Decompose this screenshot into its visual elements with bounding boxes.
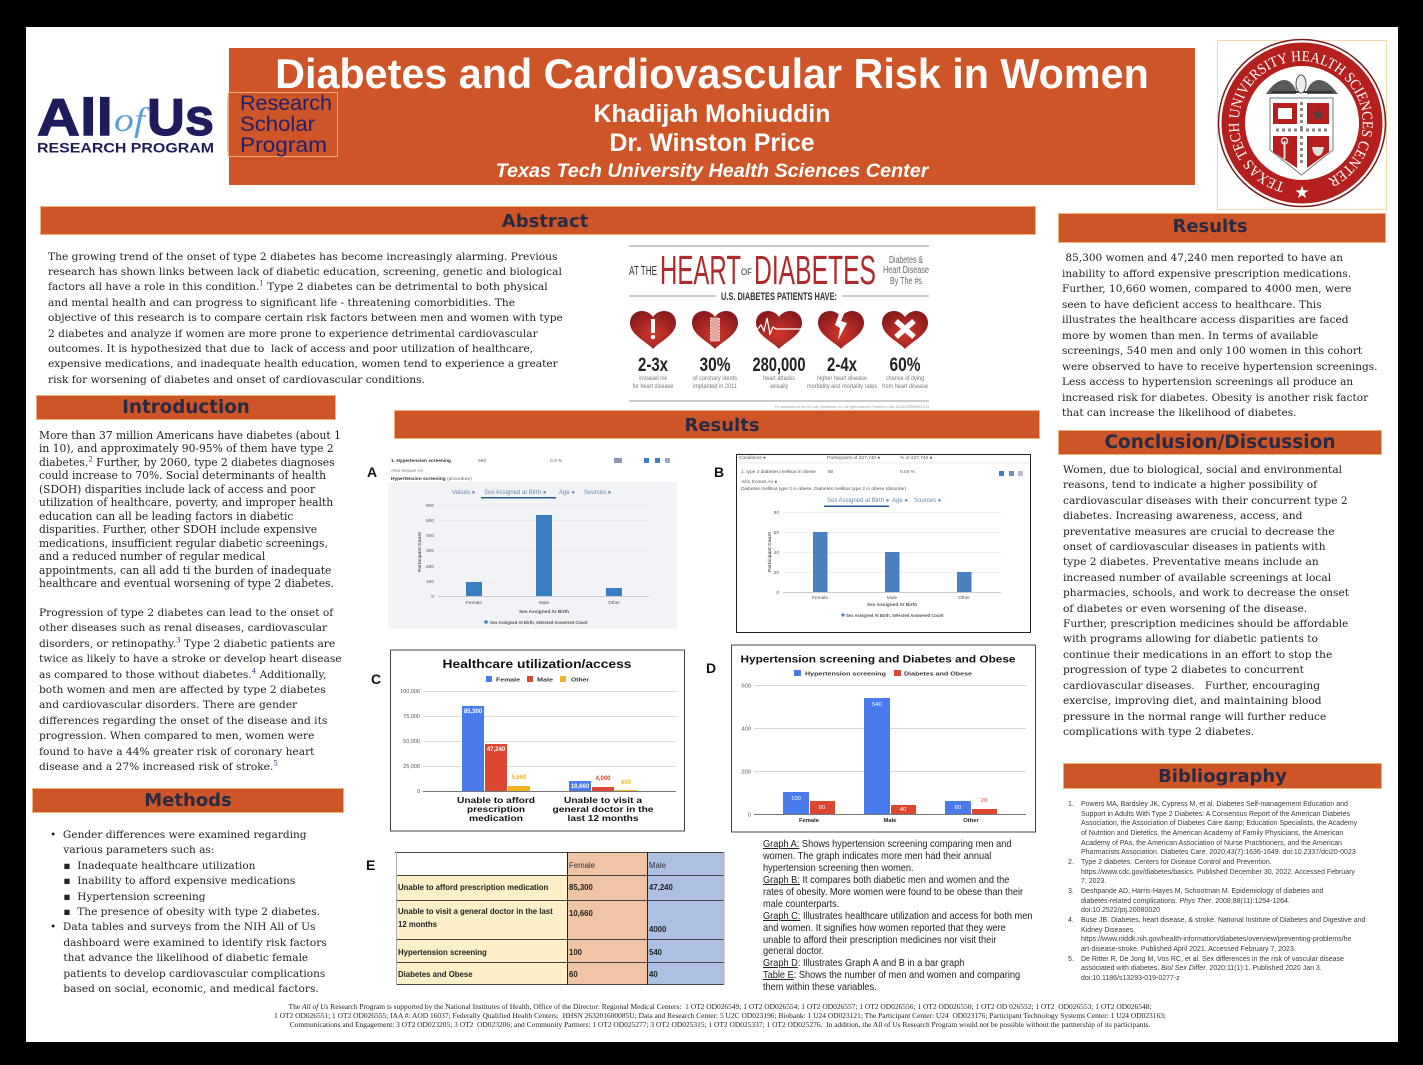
methods list: dashboard were examined to identify risk factors (63, 937, 327, 949)
introduction paragraph 2: progression. When compared to men, women were (39, 729, 314, 742)
infographic: At the Heart of Diabetes: 2-4x (827, 355, 857, 376)
chart A: hypertension screening screenshot: 200 (426, 564, 434, 570)
conclusion text: cardiovascular diseases with their concurrent type 2 (1063, 494, 1348, 507)
chart A: hypertension screening screenshot: Age ● (559, 490, 575, 496)
mentor: Dr. Winston Price (609, 130, 815, 157)
chart A: hypertension screening screenshot: Also Known As (390, 468, 424, 474)
methods list: various parameters such as: (63, 844, 214, 856)
bibliography list: diabetes-related complications. Phys Ther. 2008;88(11):1254-1264. (1081, 898, 1290, 905)
infographic: At the Heart of Diabetes: For distribution in the US only. ©Medtronic, Inc. All rights reserved. Printed in USA. UC201209999EN 2/13 (775, 404, 930, 409)
label E: E (366, 857, 375, 873)
infographic: At the Heart of Diabetes: 60% (890, 355, 921, 376)
heading: Introduction: Introduction (122, 397, 250, 418)
bibliography list: De Ritter R, De Jong M, Vos RC, et al. Sex differences in the risk of vascular disease (1081, 956, 1344, 963)
conclusion text: increased number of available screenings at local (1063, 571, 1331, 584)
results text: screenings, 540 men and only 100 women in this cohort (1062, 345, 1362, 357)
infographic: At the Heart of Diabetes: By The #s (890, 276, 922, 287)
abstract text: 2 diabetes and analyze if women are more prone to experience detrimental cardiovascular (48, 327, 538, 340)
introduction paragraph 1: and a reduced number of regular medical (39, 550, 265, 563)
chart D: hypertension screening and diabetes and obese: Hypertension screening and Diabetes and Obese (740, 654, 1016, 666)
introduction paragraph 2: both women and men are affected by type 2 diabetes (39, 683, 326, 696)
chart C: healthcare utilization/access (390, 650, 684, 831)
table E: men and women by variable (395, 852, 724, 985)
chart C: healthcare utilization/access: Other (571, 678, 590, 684)
graph captions: Graph C: Illustrates healthcare utilization and access for both men (763, 911, 1032, 922)
chart A: hypertension screening screenshot: Values ● (452, 490, 476, 496)
chart B: type 2 diabetes in obese screenshot: Male (887, 595, 898, 601)
results text: increased risk for diabetes. Obesity is another risk factor (1062, 392, 1368, 404)
bibliography list (1068, 800, 1365, 982)
label B: B (714, 464, 724, 480)
introduction paragraph 2: disease and a 27% increased risk of stroke.5 (39, 760, 278, 773)
chart C: healthcare utilization/access: 600 (621, 780, 632, 786)
results text: Further, 10,660 women, compared to 4000 men, were (1062, 283, 1352, 295)
graph captions: Graph D: Illustrates Graph A and B in a bar graph (763, 958, 964, 969)
conclusion text: exercise, improving diet, and maintaining blood (1063, 694, 1322, 707)
heading: Bibliography (1063, 763, 1382, 789)
infographic: At the Heart of Diabetes: U.S. DIABETES PATIENTS HAVE: (721, 291, 837, 303)
results text: seen to have deficient access to healthcare. This (1062, 298, 1322, 310)
chart A: hypertension screening screenshot: Sex Assigned At Birth, Selected Answered Count (490, 620, 588, 625)
chart B: type 2 diabetes in obese screenshot: Diabetes mellitus type 2 in obese, Diabetes mellitus type 2 in obese (disorder) (741, 486, 907, 492)
conclusion text: pressure in the normal range will further reduce (1063, 710, 1326, 722)
chart D: hypertension screening and diabetes and obese: 40 (900, 807, 906, 813)
introduction paragraph 1: healthcare and eventual worsening of type 2 diabetes. (39, 577, 334, 590)
bibliography list: Support in Adults With Type 2 Diabetes: A Consensus Report of the American Diabetes (1081, 811, 1350, 818)
chart C: healthcare utilization/access: prescription (467, 804, 525, 814)
methods list: • Gender differences were examined regarding (50, 829, 307, 841)
bibliography list: Deshpande AD, Harris-Hayes M, Schootman M. Epidemiology of diabetes and (1081, 888, 1323, 895)
chart A: hypertension screening screenshot: 600 (426, 503, 434, 509)
heading: Results (center) (394, 410, 1040, 439)
logo: Research Scholar Program: Research (240, 91, 332, 115)
table E: men and women by variable: Hypertension screening (398, 948, 487, 957)
bibliography list: associated with diabetes. Biol Sex Differ. 2020;11(1):1. Published 2020 Jan 3. (1081, 965, 1322, 972)
chart D: hypertension screening and diabetes and obese (732, 645, 1036, 832)
chart B: type 2 diabetes in obese screenshot: Other (958, 595, 970, 601)
chart A: hypertension screening screenshot: Female (466, 600, 482, 606)
bibliography list: 1. (1068, 801, 1074, 808)
results text: 85,300 women and 47,240 men reported to have an (1065, 252, 1343, 264)
institution: Texas Tech University Health Sciences Center (496, 160, 928, 182)
introduction paragraph 1: could increase to 70%. Social determinants of health (39, 469, 326, 482)
chart C: healthcare utilization/access: Female (496, 678, 520, 684)
chart B: type 2 diabetes in obese screenshot: 0.04 % (900, 469, 916, 475)
introduction paragraph 1 (39, 429, 341, 590)
infographic: At the Heart of Diabetes: DIABETES (754, 247, 876, 293)
conclusion text: type 2 diabetes. Preventative means include an (1063, 555, 1319, 568)
graph captions: Graph B: It compares both diabetic men and women and the (763, 875, 1009, 886)
table E: men and women by variable: Unable to afford prescription medication (398, 883, 549, 892)
table E: men and women by variable: 4000 (649, 925, 667, 934)
chart A: hypertension screening screenshot: 100 (426, 579, 434, 585)
table E: men and women by variable: 10,660 (569, 909, 594, 918)
introduction paragraph 1: disparities. Further, other SDOH include expensive (39, 523, 317, 536)
results text: illustrates the healthcare access disparities are faced (1062, 314, 1348, 326)
chart B: type 2 diabetes in obese screenshot (736, 454, 1030, 632)
methods list: • Data tables and surveys from the NIH All of Us (50, 921, 315, 933)
chart D: hypertension screening and diabetes and obese: Diabetes and Obese (904, 672, 973, 678)
chart A: hypertension screening screenshot: Sources ● (584, 490, 612, 496)
bibliography list: 7, 2023. (1081, 878, 1106, 885)
chart A: hypertension screening screenshot (388, 458, 677, 629)
bibliography list: 4. (1068, 917, 1074, 924)
graph captions (763, 839, 1032, 993)
chart D: hypertension screening and diabetes and obese: 540 (872, 702, 882, 708)
introduction paragraph 2: and cardiovascular disorders. There are gender (39, 698, 297, 711)
infographic: At the Heart of Diabetes: of coronary stents (693, 375, 738, 382)
introduction paragraph 1: diabetes.2 Further, by 2060, type 2 diabetes diagnoses (39, 455, 335, 469)
infographic: At the Heart of Diabetes (629, 246, 930, 409)
abstract text: The growing trend of the onset of type 2 diabetes has become increasingly alarming. Previous (48, 250, 557, 262)
infographic: At the Heart of Diabetes: 280,000 (752, 355, 806, 376)
introduction paragraph 1: appointments, can all add ti the burden of inadequate (39, 564, 331, 577)
conclusion text: pharmacies, schools, and work to decrease the onset (1063, 586, 1349, 599)
chart C: healthcare utilization/access: 50,000 (403, 739, 420, 745)
chart D: hypertension screening and diabetes and obese: Hypertension screening (805, 672, 887, 678)
heading: Results (center): Results (684, 415, 760, 436)
results text: inability to afford expensive prescription medications. (1062, 268, 1351, 280)
icon: heart cross (882, 311, 928, 349)
logo: All of Us Research Program (37, 89, 228, 156)
chart C: healthcare utilization/access: medication (469, 813, 523, 823)
abstract text: expensive medications, and inadequate health education, women tend to experience a greater (48, 357, 558, 370)
infographic: At the Heart of Diabetes: 2-3x (638, 355, 668, 376)
graph captions: and women. It signifies how women reported that they were (763, 923, 1006, 934)
chart D: hypertension screening and diabetes and obese: 100 (791, 796, 801, 802)
methods list: that advance the likelihood of diabetic female (63, 952, 308, 964)
chart B: type 2 diabetes in obese screenshot: Also Known As ● (740, 479, 777, 485)
chart B: type 2 diabetes in obese screenshot: Conditions ● (739, 455, 766, 461)
chart C: healthcare utilization/access: 100,000 (400, 689, 420, 695)
funding footer: 1 OT2 OD026551; 1 OT2 OD026555; IAA #: AOD 16037; Federally Qualified Health Centers: HHSN 263201600085U; Data and Research Center: 5 U2C OD023196; Biobank: 1 U24 OD023121; The Participant Center: U24 OD023176; Participant Technology Systems Center: 1 U24 OD023163; (274, 1011, 1166, 1020)
logo: Research Scholar Program: Program (240, 133, 327, 157)
infographic: At the Heart of Diabetes: Heart Disease (883, 265, 929, 276)
introduction paragraph 2: Progression of type 2 diabetes can lead to the onset of (39, 606, 333, 619)
infographic: At the Heart of Diabetes: AT THE (629, 263, 657, 278)
table E: men and women by variable: 12 months (398, 920, 438, 929)
conclusion text: Women, due to biological, social and environmental (1063, 463, 1342, 476)
funding footer: The All of Us Research Program is supported by the National Institutes of Health, Office of the Director: Regional Medical Centers: 1 OT2 OD026549; 1 OT2 OD026554; 1 OT2 OD026557; 1 OT2 OD026556; 1 OT2 OD026550; 1 OT2 OD 026552; 1 OT2 OD026553; 1 OT2 OD026548; (289, 1002, 1151, 1011)
bibliography list: Kidney Diseases. (1081, 927, 1135, 934)
bibliography list: Buse JB. Diabetes, heart disease, & stroke. National Institute of Diabetes and Digestive and (1081, 917, 1365, 924)
infographic: At the Heart of Diabetes: for heart disease (632, 383, 674, 390)
bibliography list: 5. (1068, 956, 1074, 963)
abstract text: and mental health and can progress to significant life - threatening comorbidities. The (48, 296, 515, 309)
introduction paragraph 1: in 10), and approximately 90-95% of them have type 2 (39, 442, 334, 455)
introduction paragraph 2 (39, 606, 342, 773)
results text: that can increase the likelihood of diabetes. (1062, 407, 1297, 419)
methods list: patients to develop cardiovascular complications (63, 968, 325, 980)
conclusion text: diabetes. Increasing awareness, access, and (1063, 509, 1302, 522)
chart B: type 2 diabetes in obese screenshot: % of 227,740 ● (900, 455, 933, 461)
chart A: hypertension screening screenshot: 1. Hypertension screening (391, 458, 451, 464)
abstract text: objective of this research is to compare certain risk factors between men and women with type (48, 311, 563, 324)
logo: All of Us Research Program: All (37, 89, 113, 147)
infographic: At the Heart of Diabetes: annually (770, 383, 789, 390)
logo: All of Us Research Program: Us (147, 89, 214, 147)
heading: Introduction (36, 395, 336, 420)
chart C: healthcare utilization/access: 0 (417, 789, 420, 795)
methods list: ▪ Inability to afford expensive medications (63, 875, 295, 887)
chart A: hypertension screening screenshot: Sex Assigned At Birth (519, 609, 569, 615)
chart B: type 2 diabetes in obese screenshot: 80 (774, 510, 779, 516)
abstract text: risk for worsening of diabetes and onset of cardiovascular conditions. (48, 373, 425, 386)
results text: more by women than men. In terms of available (1062, 330, 1318, 342)
infographic: At the Heart of Diabetes: OF (741, 267, 752, 277)
graph captions: Table E: Shows the number of men and women and comparing (763, 970, 1020, 981)
chart C: healthcare utilization/access: 4,000 (595, 776, 611, 782)
icon: heart alert (630, 311, 676, 349)
conclusion text: continue their medications in an effort to stop the (1063, 648, 1332, 661)
methods list: ▪ Inadequate healthcare utilization (63, 860, 255, 872)
bibliography list: 3. (1068, 888, 1074, 895)
table E: men and women by variable: 85,300 (569, 883, 594, 892)
chart B: type 2 diabetes in obese screenshot: 60 (774, 530, 779, 536)
infographic: At the Heart of Diabetes: morbidity and mortality rates (807, 383, 878, 390)
abstract text: research has shown links between lack of diabetic education, screening, genetic and biological (48, 265, 562, 278)
chart D: hypertension screening and diabetes and obese: Other (963, 818, 979, 824)
bibliography list: https://www.niddk.nih.gov/health-information/diabetes/overview/preventing-problems/he (1081, 936, 1351, 943)
infographic: At the Heart of Diabetes: increased risk (639, 375, 668, 382)
chart D: hypertension screening and diabetes and obese: Male (884, 818, 897, 824)
bibliography list: Association, the Association of Diabetes Care &amp; Education Specialists, the Academy (1081, 820, 1357, 827)
chart C: healthcare utilization/access: 25,000 (403, 764, 420, 770)
chart C: healthcare utilization/access: 85,300 (464, 709, 483, 715)
introduction paragraph 1: (SDOH) disparities include lack of access and poor (39, 483, 315, 496)
introduction paragraph 1: utilization of healthcare, poverty, and improper health (39, 496, 333, 509)
author: Khadijah Mohiuddin (594, 101, 830, 128)
table E: men and women by variable: Male (649, 861, 666, 870)
methods list: based on social, economic, and medical factors. (63, 983, 319, 995)
icon: university seal: TEXAS TECH UNIVERSITY HEALTH SCIENCES CENTER (1228, 51, 1373, 192)
abstract text: factors all have a role in this condition.1 Type 2 diabetes can be detrimental to both physical (48, 280, 548, 293)
heading: Conclusion/Discussion (1058, 430, 1382, 455)
introduction paragraph 2: found to have a 44% greater risk of coronary heart (39, 745, 314, 758)
infographic: At the Heart of Diabetes: HEART (660, 247, 741, 293)
infographic: At the Heart of Diabetes: 30% (700, 355, 731, 376)
conclusion text: progression of type 2 diabetes to concurrent (1063, 663, 1304, 676)
chart B: type 2 diabetes in obese screenshot: 80 (828, 469, 834, 475)
chart D: hypertension screening and diabetes and obese: 200 (741, 770, 751, 776)
infographic: At the Heart of Diabetes: Diabetes & (889, 255, 923, 266)
introduction paragraph 2: as compared to those without diabetes.4 Additionally, (39, 667, 326, 681)
introduction paragraph 1: education can all be leading factors in diabetic (39, 510, 293, 523)
chart B: type 2 diabetes in obese screenshot: Participant Count (767, 532, 773, 572)
introduction paragraph 1: More than 37 million Americans have diabetes (about 1 (39, 429, 341, 442)
graph captions: Graph A: Shows hypertension screening comparing men and (763, 839, 1011, 850)
chart C: healthcare utilization/access: 10,660 (571, 784, 590, 790)
chart D: hypertension screening and diabetes and obese: 60 (819, 805, 825, 811)
conclusion text: onset of cardiovascular diseases in patients with (1063, 540, 1326, 553)
chart B: type 2 diabetes in obese screenshot: 0 (776, 590, 779, 596)
graph captions: male counterparts. (763, 899, 839, 910)
funding footer: Communications and Engagement: 3 OT2 OD023205; 3 OT2 OD023206; and Community Partners: 1 OT2 OD025277; 3 OT2 OD025315; 1 OT2 OD025337; 1 OT2 OD025276. In addition, the All of Us Research Program would not be possible without the partnership of its participants. (290, 1020, 1150, 1029)
heading: Results (right): Results (1172, 216, 1248, 237)
introduction paragraph 1: medications, insufficient regular diabetic screenings, (39, 537, 328, 550)
abstract text: outcomes. It is hypothesized that due to lack of access and poor utilization of healthcare, (48, 342, 533, 355)
infographic: At the Heart of Diabetes: heart attacks (763, 375, 796, 382)
icon: university seal: ★ (1294, 183, 1310, 202)
methods list: ▪ The presence of obesity with type 2 diabetes. (63, 906, 320, 918)
title banner (229, 48, 1195, 185)
chart B: type 2 diabetes in obese screenshot: 1. type 2 diabetes mellitus in obese (741, 469, 816, 475)
table E: men and women by variable: 47,240 (649, 883, 674, 892)
heading: Methods (32, 788, 344, 813)
chart B: type 2 diabetes in obese screenshot: Age ● (892, 498, 908, 504)
introduction paragraph 2: disorders, or retinopathy.3 Type 2 diabetic patients are (39, 636, 335, 650)
chart C: healthcare utilization/access: 75,000 (403, 714, 420, 720)
table E: men and women by variable: 40 (649, 970, 658, 979)
introduction paragraph 2: differences regarding the onset of the disease and its (39, 714, 327, 727)
table E: men and women by variable: Diabetes and Obese (398, 970, 473, 979)
chart B: type 2 diabetes in obese screenshot: Participants of 227,740 ● (827, 455, 880, 461)
table E: men and women by variable: 60 (569, 970, 578, 979)
results text: Less access to hypertension screenings all produce an (1062, 376, 1353, 388)
heading: Abstract: Abstract (502, 211, 588, 232)
bibliography list: doi:10.2522/ptj.20080020 (1081, 907, 1160, 914)
chart A: hypertension screening screenshot: Other (608, 600, 620, 606)
graph captions: women. The graph indicates more men had their annual (763, 851, 991, 862)
label A: A (367, 464, 377, 480)
label D: D (706, 660, 716, 676)
chart C: healthcare utilization/access: 47,240 (487, 747, 506, 753)
chart A: hypertension screening screenshot: Hypertension screening (procedure) (391, 476, 472, 482)
icon: broken heart (818, 311, 864, 349)
label C: C (371, 671, 381, 687)
chart D: hypertension screening and diabetes and obese: Female (799, 818, 820, 824)
conclusion text: complications with type 2 diabetes. (1063, 725, 1254, 738)
results text (1062, 252, 1378, 419)
conclusion text: reasons, tend to indicate a higher possibility of (1063, 478, 1317, 491)
heading: Methods: Methods (144, 790, 232, 811)
chart D: hypertension screening and diabetes and obese: 400 (741, 726, 751, 732)
chart A: hypertension screening screenshot: Sex Assigned at Birth ● (484, 490, 547, 496)
graph captions: them within these variables. (763, 982, 877, 993)
table E: men and women by variable: 100 (569, 948, 583, 957)
logo: All of Us Research Program: of (114, 102, 150, 139)
bibliography list: 2. (1068, 859, 1074, 866)
chart C: healthcare utilization/access: general doctor in the (552, 804, 654, 814)
methods list: ▪ Hypertension screening (63, 891, 206, 903)
chart D: hypertension screening and diabetes and obese: 60 (955, 805, 961, 811)
graph captions: rates of obesity. More women were found to be obese than their (763, 887, 1023, 898)
chart B: type 2 diabetes in obese screenshot: Sex Assigned At Birth, Selected Answered Count (846, 613, 944, 618)
logo: Research Scholar Program: Scholar (240, 112, 315, 136)
chart A: hypertension screening screenshot: 0 (431, 594, 434, 600)
chart A: hypertension screening screenshot: 500 (426, 518, 434, 524)
chart D: hypertension screening and diabetes and obese: 0 (748, 812, 751, 818)
chart C: healthcare utilization/access: 5,660 (511, 775, 527, 781)
bibliography list: art-disease-stroke. Published April 2021. Accessed February 7, 2023. (1081, 946, 1296, 953)
conclusion text: Further, prescription medicines should be affordable (1063, 617, 1348, 630)
chart B: type 2 diabetes in obese screenshot: Sex Assigned At Birth (867, 602, 917, 608)
table E: men and women by variable: 540 (649, 948, 663, 957)
icon: university seal: ★ (1311, 107, 1325, 124)
table E: men and women by variable: Unable to visit a general doctor in the last (398, 907, 553, 916)
chart C: healthcare utilization/access: Unable to visit a (564, 795, 642, 805)
title: Diabetes and Cardiovascular Risk in Women (275, 51, 1149, 97)
abstract text (48, 250, 563, 386)
icon: heart stent (692, 311, 738, 349)
funding footer (274, 1002, 1166, 1029)
chart B: type 2 diabetes in obese screenshot: Female (812, 595, 828, 601)
chart B: type 2 diabetes in obese screenshot: 20 (774, 570, 779, 576)
chart A: hypertension screening screenshot: 400 (426, 533, 434, 539)
conclusion text (1063, 463, 1349, 738)
chart D: hypertension screening and diabetes and obese: 20 (981, 798, 987, 804)
chart B: type 2 diabetes in obese screenshot: Sex Assigned at Birth ● (827, 498, 890, 504)
infographic: At the Heart of Diabetes: implanted in 2011 (693, 383, 737, 390)
logo: Research Scholar Program (228, 91, 338, 157)
chart A: hypertension screening screenshot: Male (539, 600, 550, 606)
bibliography list: Powers MA, Bardsley JK, Cypress M, et al. Diabetes Self-management Education and (1081, 801, 1348, 808)
chart A: hypertension screening screenshot: Participant Count (417, 532, 423, 572)
chart A: hypertension screening screenshot: 660 (478, 458, 486, 464)
heading: Results (right) (1058, 213, 1386, 243)
bibliography list: doi:10.1186/s13293-019-0277-z (1081, 975, 1180, 982)
infographic: At the Heart of Diabetes: chance of dying (886, 375, 924, 382)
bibliography list: Pharmacists Association. Diabetes Care. 2020;43(7):1636-1649. doi:10.2337/dci20-0023 (1081, 849, 1356, 856)
heading: Abstract (40, 206, 1036, 235)
conclusion text: preventative measures are crucial to decrease the (1063, 525, 1335, 538)
graph captions: hypertension screening then women. (763, 863, 914, 874)
graph captions: general doctor. (763, 946, 824, 957)
infographic: At the Heart of Diabetes: from heart disease (882, 383, 928, 390)
chart A: hypertension screening screenshot: 0.3 % (550, 458, 563, 464)
heading: Conclusion/Discussion: Conclusion/Discussion (1104, 432, 1336, 453)
chart C: healthcare utilization/access: last 12 months (568, 813, 639, 823)
results text: were observed to have to receive hypertension screenings. (1062, 360, 1378, 372)
chart B: type 2 diabetes in obese screenshot: Sources ● (914, 498, 942, 504)
chart A: hypertension screening screenshot: 300 (426, 548, 434, 554)
chart D: hypertension screening and diabetes and obese: 600 (741, 684, 751, 690)
heading: Bibliography: Bibliography (1158, 766, 1287, 787)
infographic: At the Heart of Diabetes: higher heart disease (817, 375, 867, 382)
introduction paragraph 2: twice as likely to have a stroke or develop heart disease (39, 652, 342, 665)
conclusion text: cardiovascular diseases. Further, encouraging (1063, 679, 1320, 692)
table E: men and women by variable: Female (569, 861, 595, 870)
bibliography list: Type 2 diabetes. Centers for Disease Control and Prevention. (1081, 859, 1272, 866)
conclusion text: of diabetes or even worsening of the disease. (1063, 602, 1307, 615)
icon: heart ecg (756, 311, 802, 349)
chart B: type 2 diabetes in obese screenshot: 40 (774, 550, 779, 556)
bibliography list: of Nutrition and Dietetics, the American Academy of Family Physicians, the American (1081, 830, 1343, 837)
introduction paragraph 2: other diseases such as renal diseases, cardiovascular (39, 621, 327, 634)
graph captions: unable to afford their prescription medicines nor visit their (763, 934, 996, 946)
methods list (50, 829, 327, 995)
conclusion text: with programs allowing for diabetic patients to (1063, 632, 1318, 645)
bibliography list: https://www.cdc.gov/diabetes/basics. Published December 30, 2022. Accessed February (1081, 869, 1355, 876)
chart C: healthcare utilization/access: Healthcare utilization/access (442, 659, 632, 671)
chart C: healthcare utilization/access: Unable to afford (457, 795, 535, 805)
logo: All of Us Research Program: RESEARCH PROGRAM (37, 140, 214, 156)
bibliography list: Academy of PAs, the American Association of Nurse Practitioners, and the American (1081, 840, 1342, 847)
chart C: healthcare utilization/access: Male (537, 678, 553, 684)
